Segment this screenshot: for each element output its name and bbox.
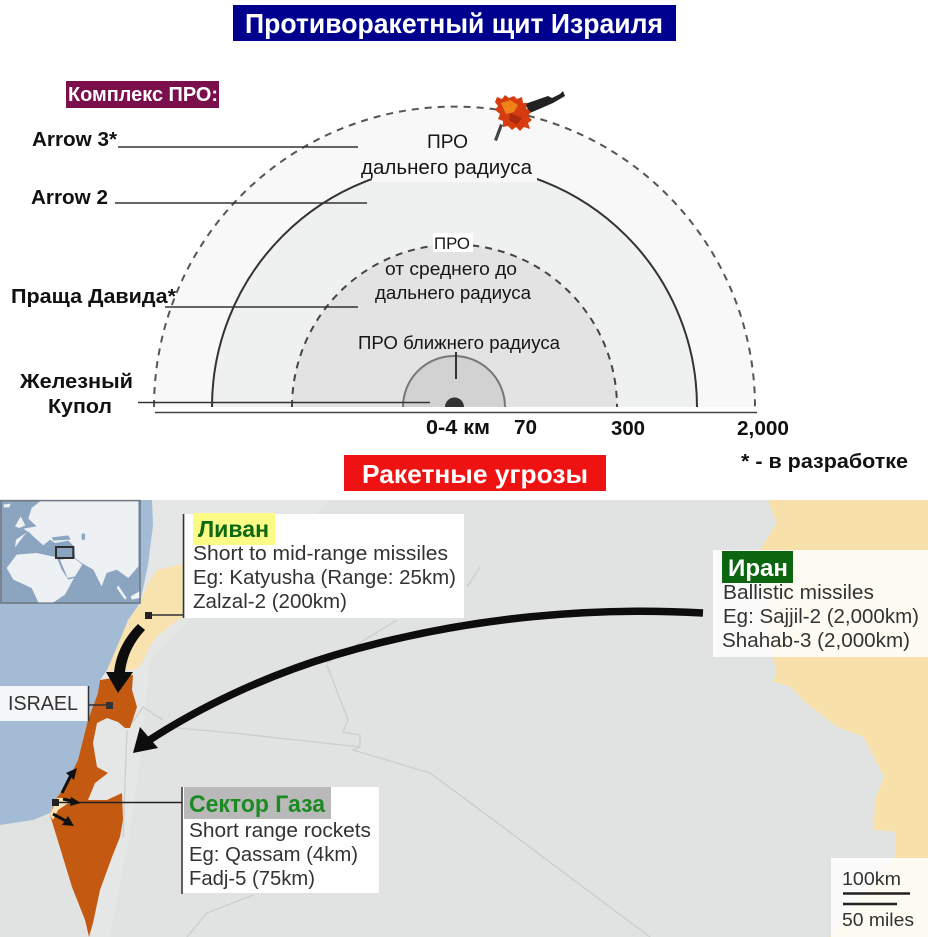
label: medium to long range: ПРО (434, 234, 470, 253)
baseline (155, 412, 757, 414)
lighter land patch (50, 500, 330, 937)
heading: defence systems: Комплекс ПРО: (68, 84, 218, 106)
panel: Gaza (52, 787, 379, 894)
label: short range: ПРО ближнего радиуса (358, 332, 561, 353)
Israel territory (50, 675, 137, 937)
Lebanon title (193, 513, 275, 545)
panel: Iran: Eg: Sajjil-2 (2,000km) (723, 605, 919, 628)
inset locator (56, 547, 73, 558)
arrow: Iran to Israel (133, 611, 703, 753)
panel: Iran (713, 550, 928, 657)
map (0, 500, 928, 937)
axis values: 300 (611, 418, 645, 440)
outer range zone (154, 107, 755, 407)
Lebanon text: Short to mid-range missiles (193, 542, 448, 565)
panel: Gaza: Сектор Газа (189, 791, 326, 818)
Gaza strip (50, 798, 70, 820)
arrows: Gaza rockets (53, 768, 81, 826)
Iran text: Ballistic missiles (723, 581, 874, 604)
panel: Iran: Иран (728, 555, 788, 582)
label: long range: ПРО (427, 132, 468, 153)
label: Israel: ISRAEL (8, 693, 78, 715)
long range zone (212, 165, 697, 407)
label: medium to long range: дальнего радиуса (375, 283, 532, 303)
label: Iron Dome (19, 370, 430, 418)
scale bar: 100km (842, 869, 901, 889)
scale bar (831, 858, 928, 937)
chart: defence range semicircles (154, 107, 757, 413)
axis values (426, 417, 789, 440)
label: long range: дальнего радиуса (361, 157, 533, 179)
Iran title (722, 551, 793, 583)
Iran territory (760, 500, 928, 937)
Gaza title (184, 787, 331, 819)
panel: Iran: Shahab-3 (2,000km) (722, 629, 910, 652)
heading: missile threats: Ракетные угрозы (362, 459, 588, 489)
scale bar: 50 miles (842, 910, 914, 930)
label: Iron Dome: Купол (48, 395, 112, 418)
title: Противоракетный щит Израиля (245, 8, 663, 39)
panel: Lebanon: Zalzal-2 (200km) (193, 590, 347, 613)
icon: intercepted missile (494, 91, 565, 141)
text mask: long range (372, 157, 537, 182)
panel: Lebanon (145, 513, 464, 619)
borders (123, 567, 650, 937)
sea (0, 500, 153, 825)
inset world map (1, 501, 140, 603)
label: Arrow 2: Arrow 2 (31, 187, 108, 209)
short range zone (403, 356, 505, 407)
minimal range zone (445, 398, 464, 407)
label: Arrow 3: Arrow 3* (32, 129, 117, 151)
label: long range (361, 132, 533, 179)
label: medium to long range: от среднего до (385, 259, 517, 279)
panel: Gaza: Fadj-5 (75km) (189, 867, 315, 890)
footnote: * - в разработке (741, 451, 908, 473)
inset land (3, 501, 139, 602)
panel: Gaza: Eg: Qassam (4km) (189, 843, 358, 866)
panel: Lebanon: Ливан (198, 516, 269, 542)
axis values: 2,000 (737, 418, 789, 440)
panel: Lebanon: Eg: Katyusha (Range: 25km) (193, 566, 456, 589)
text mask: medium range (433, 233, 473, 252)
label: David's Sling: Праща Давида* (11, 285, 176, 308)
axis values: 70 (514, 417, 537, 439)
Gaza text: Short range rockets (189, 819, 371, 842)
label: Iron Dome: Железный (19, 370, 133, 393)
medium range zone (292, 244, 617, 407)
map land background (0, 500, 928, 937)
label: medium to long range (375, 234, 532, 303)
Lebanon territory (107, 564, 183, 672)
arrow: Lebanon to Israel (106, 624, 145, 693)
label: Israel (0, 686, 113, 721)
axis values: 0-4 км (426, 417, 490, 439)
